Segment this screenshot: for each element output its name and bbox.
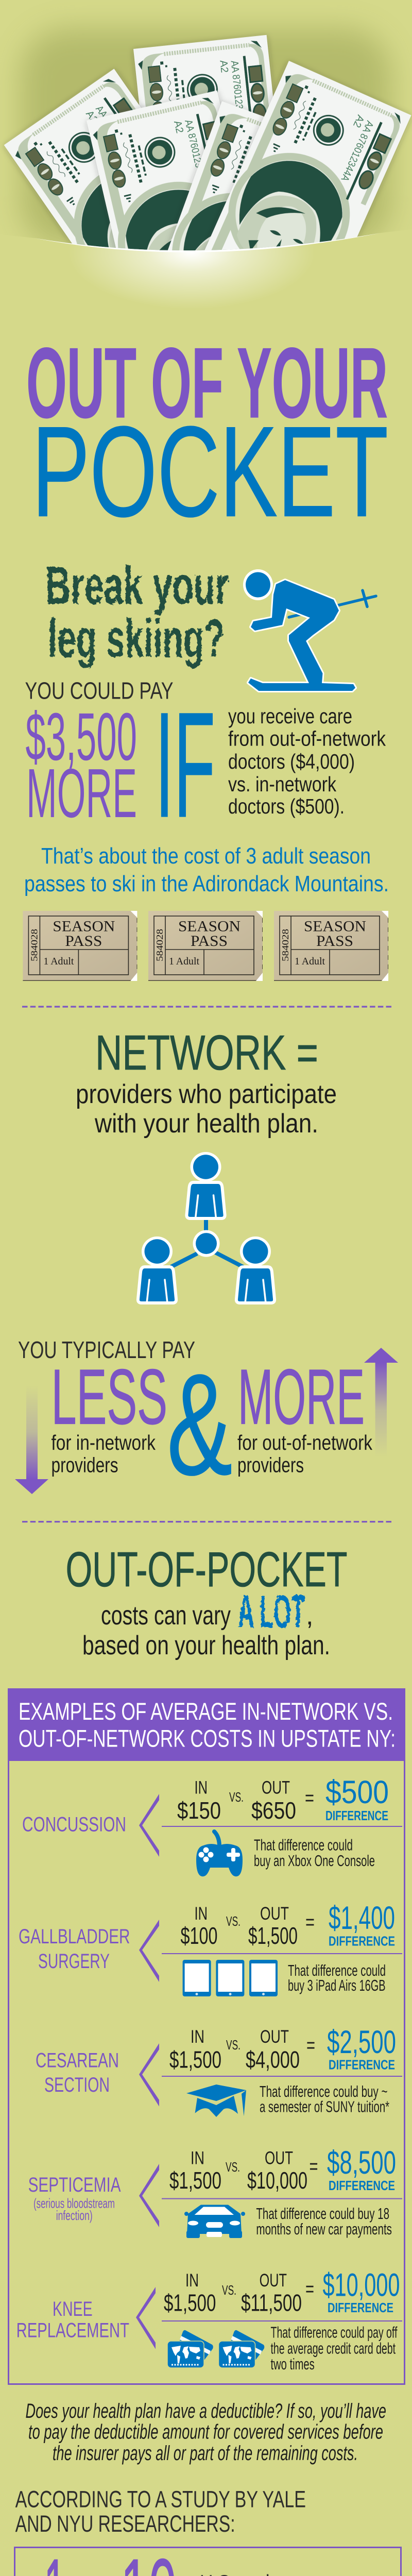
- label: concussion: CONCUSSION: [22, 1814, 126, 1836]
- icon: season pass 1: 584028: [29, 929, 39, 961]
- label: septicemia: SEPTICEMIA: [28, 2174, 121, 2196]
- cost comparison: OUT: [260, 1904, 289, 1924]
- heading: break your leg skiing: [45, 556, 229, 669]
- stat: about 1 in 10: [23, 2539, 177, 2576]
- caption: in-network: providers: [52, 1453, 118, 1477]
- label: gallbladder surgery: SURGERY: [38, 1950, 110, 1973]
- cost comparison: $100: [180, 1922, 217, 1949]
- chevron: [136, 2287, 156, 2349]
- cost comparison: =: [305, 2278, 314, 2300]
- icon: season pass 2: PASS: [191, 933, 228, 950]
- cost comparison: VS.: [222, 2282, 236, 2298]
- row: septicemia: [28, 2145, 402, 2238]
- cost comparison: IN: [191, 2148, 204, 2168]
- illustration: dollar bills in a pocket: AA 876012344A: [338, 119, 375, 183]
- cost comparison: =: [306, 2034, 315, 2057]
- caption: in-network: for in-network: [52, 1431, 156, 1454]
- caption: in-network: [52, 1431, 156, 1477]
- caption: out-of-network: providers: [237, 1453, 304, 1477]
- heading: out-of-pocket costs: [66, 1542, 347, 1660]
- icon: season pass 3: [274, 911, 388, 981]
- heading: out-of-pocket costs: based on your health plan.: [82, 1631, 330, 1660]
- icon: season pass 2: [148, 911, 263, 981]
- icon: season pass 2: SEASON: [178, 918, 241, 935]
- cost comparison: DIFFERENCE: [329, 1933, 395, 1948]
- icon: graduation cap: [186, 2084, 246, 2117]
- heading: yale and nyu study: [15, 2486, 306, 2537]
- text: you could pay 3,500 more if: MORE: [26, 754, 137, 832]
- cost comparison: $500: [325, 1774, 389, 1810]
- text: you could pay 3,500 more if: IF: [155, 681, 215, 849]
- definition: network: with your health plan.: [94, 1109, 318, 1139]
- cost comparison: VS.: [226, 2037, 241, 2053]
- note: credit card debt: [271, 2324, 398, 2373]
- text: deductible note: [26, 2400, 386, 2465]
- cost comparison: [164, 2267, 400, 2316]
- cost comparison: IN: [195, 1778, 208, 1798]
- icon: season pass 2: 1 Adult: [169, 956, 199, 967]
- heading: out-of-pocket costs: ,: [306, 1601, 313, 1631]
- chevron: [139, 1920, 159, 1982]
- label: cesarean section: [36, 2049, 119, 2096]
- text: you could pay 3,500 more if: [25, 677, 386, 849]
- label: gallbladder surgery: [19, 1925, 130, 1973]
- label: gallbladder surgery: GALLBLADDER: [19, 1925, 130, 1948]
- icon: car: [184, 2205, 245, 2238]
- icon: credit cards: [167, 2330, 264, 2368]
- heading: yale and nyu study: ACCORDING TO A STUDY BY YALE: [15, 2486, 306, 2513]
- chevron: [139, 2164, 159, 2227]
- icon: season pass 3: 1 Adult: [295, 956, 325, 967]
- note: ipads: [288, 1961, 386, 1994]
- row: knee replacement: [16, 2267, 402, 2373]
- icon: season pass 1: 1 Adult: [43, 956, 74, 967]
- text: you could pay 3,500 more if: $3,500: [26, 699, 137, 774]
- row: concussion: [22, 1774, 402, 1876]
- cost comparison: =: [305, 1787, 314, 1809]
- heading: break your leg skiing: leg skiing?: [48, 609, 225, 669]
- cost comparison: =: [309, 2155, 318, 2178]
- note: car payments: [256, 2205, 392, 2238]
- panel: examples of costs: [8, 1688, 405, 2384]
- label: knee replacement: KNEE: [53, 2298, 93, 2320]
- illustration: dollar bills in a pocket: [2, 19, 412, 304]
- cost comparison: $11,500: [241, 2290, 302, 2316]
- heading: out-of-pocket costs: costs can vary: [101, 1601, 231, 1631]
- cost comparison: DIFFERENCE: [329, 2057, 395, 2073]
- definition: network: NETWORK =: [95, 1025, 318, 1080]
- cost comparison: IN: [185, 2270, 199, 2291]
- label: septicemia: [28, 2174, 121, 2223]
- row: gallbladder surgery: [19, 1900, 402, 1996]
- row: cesarean section: [36, 2024, 402, 2117]
- cost comparison: [177, 1774, 389, 1824]
- icon: season pass 1: PASS: [65, 933, 102, 950]
- text: you could pay 3,500 more if: doctors ($500).: [228, 794, 345, 818]
- cost comparison: OUT: [260, 2027, 289, 2047]
- caption: out-of-network: [237, 1431, 372, 1477]
- icon: season pass 2: 584028: [154, 929, 165, 961]
- chevron: [139, 2043, 159, 2106]
- label: cesarean section: SECTION: [44, 2074, 110, 2096]
- cost comparison: $4,000: [246, 2046, 300, 2073]
- chevron: [139, 1794, 159, 1857]
- title: [26, 327, 388, 544]
- illustration: dollar bills in a pocket: AA 876012344A: [229, 60, 247, 126]
- cost comparison: =: [305, 1911, 315, 1934]
- cost comparison: DIFFERENCE: [329, 2178, 395, 2193]
- arrow: down: [15, 1385, 48, 1494]
- cost comparison: $150: [177, 1797, 221, 1824]
- label: knee replacement: [16, 2298, 129, 2342]
- cost comparison: OUT: [260, 2270, 287, 2291]
- icon: skier: [243, 569, 376, 691]
- cost comparison: $1,500: [248, 1922, 298, 1949]
- cost comparison: $1,500: [169, 2167, 221, 2194]
- cost comparison: VS.: [226, 1913, 241, 1929]
- heading: yale and nyu study: AND NYU RESEARCHERS:: [15, 2511, 235, 2537]
- subheading: you typically pay: YOU TYPICALLY PAY: [18, 1336, 195, 1363]
- panel: one in ten: [14, 2539, 401, 2576]
- icon: game controller: [196, 1832, 243, 1876]
- cost comparison: OUT: [265, 2148, 293, 2168]
- illustration: dollar bills in a pocket: AA 876012344A: [93, 104, 140, 164]
- ampersand: &: [167, 1345, 233, 1505]
- text: you could pay 3,500 more if: YOU COULD PAY: [25, 677, 173, 704]
- icon: season pass 3: PASS: [316, 933, 353, 950]
- illustration: dollar bills in a pocket: AA 876012344A: [182, 118, 208, 185]
- cost comparison: [169, 2145, 396, 2194]
- cost comparison: IN: [191, 2027, 204, 2047]
- text: you could pay 3,500 more if: you receive care: [228, 704, 352, 728]
- section: pay less and more: [15, 1336, 398, 1505]
- icon: season pass 1: [23, 911, 137, 981]
- label: septicemia: (serious bloodstream: [33, 2195, 115, 2211]
- caption: out-of-network: for out-of-network: [237, 1431, 372, 1454]
- cost comparison: $650: [251, 1797, 296, 1824]
- cost comparison: $10,000: [247, 2167, 307, 2194]
- cost comparison: OUT: [262, 1778, 290, 1798]
- cost comparison: IN: [195, 1904, 208, 1924]
- cost comparison: DIFFERENCE: [328, 2300, 393, 2315]
- illustration: dollar bills in a pocket: A2: [83, 109, 100, 125]
- label: septicemia: infection): [56, 2208, 93, 2223]
- note: credit card debt: two times: [271, 2355, 315, 2373]
- illustration: dollar bills in a pocket: A2: [171, 120, 185, 134]
- text: season pass comparison: [24, 843, 389, 896]
- note: xbox: That difference could: [254, 1836, 353, 1854]
- icon: tablets: [183, 1960, 278, 1996]
- text: you could pay 3,500 more if: vs. in-network: [228, 772, 336, 796]
- heading: break your leg skiing: Break your: [45, 556, 229, 616]
- definition: network: providers who participate: [76, 1079, 337, 1109]
- cost comparison: VS.: [226, 2159, 240, 2175]
- icon: provider network diagram: [138, 1152, 274, 1303]
- cost comparison: $1,500: [169, 2046, 221, 2073]
- illustration: dollar bills in a pocket: A2: [217, 60, 230, 73]
- arrow: up: [364, 1348, 398, 1457]
- icon: season pass 1: SEASON: [53, 918, 115, 935]
- cost comparison: VS.: [229, 1789, 244, 1805]
- cost comparison: [169, 2024, 396, 2073]
- word: less: LESS: [52, 1353, 167, 1440]
- label: cesarean section: CESAREAN: [36, 2049, 119, 2072]
- icon: season pass 3: SEASON: [304, 918, 366, 935]
- note: suny tuition: [260, 2082, 389, 2116]
- label: knee replacement: REPLACEMENT: [16, 2319, 129, 2342]
- cost comparison: DIFFERENCE: [325, 1808, 388, 1823]
- icon: season pass 3: 584028: [280, 929, 290, 961]
- text: you could pay 3,500 more if: from out-of-network: [228, 727, 386, 751]
- definition: network: [76, 1025, 337, 1139]
- text: you could pay 3,500 more if: doctors ($4,000): [228, 750, 355, 773]
- panel header: [8, 1688, 405, 1761]
- heading: out-of-pocket costs: A LOT: [238, 1586, 305, 1638]
- cost comparison: $1,500: [164, 2290, 216, 2316]
- cost comparison: [180, 1900, 395, 1949]
- note: xbox: [254, 1836, 375, 1870]
- illustration: dollar bills in a pocket: A2: [351, 113, 366, 129]
